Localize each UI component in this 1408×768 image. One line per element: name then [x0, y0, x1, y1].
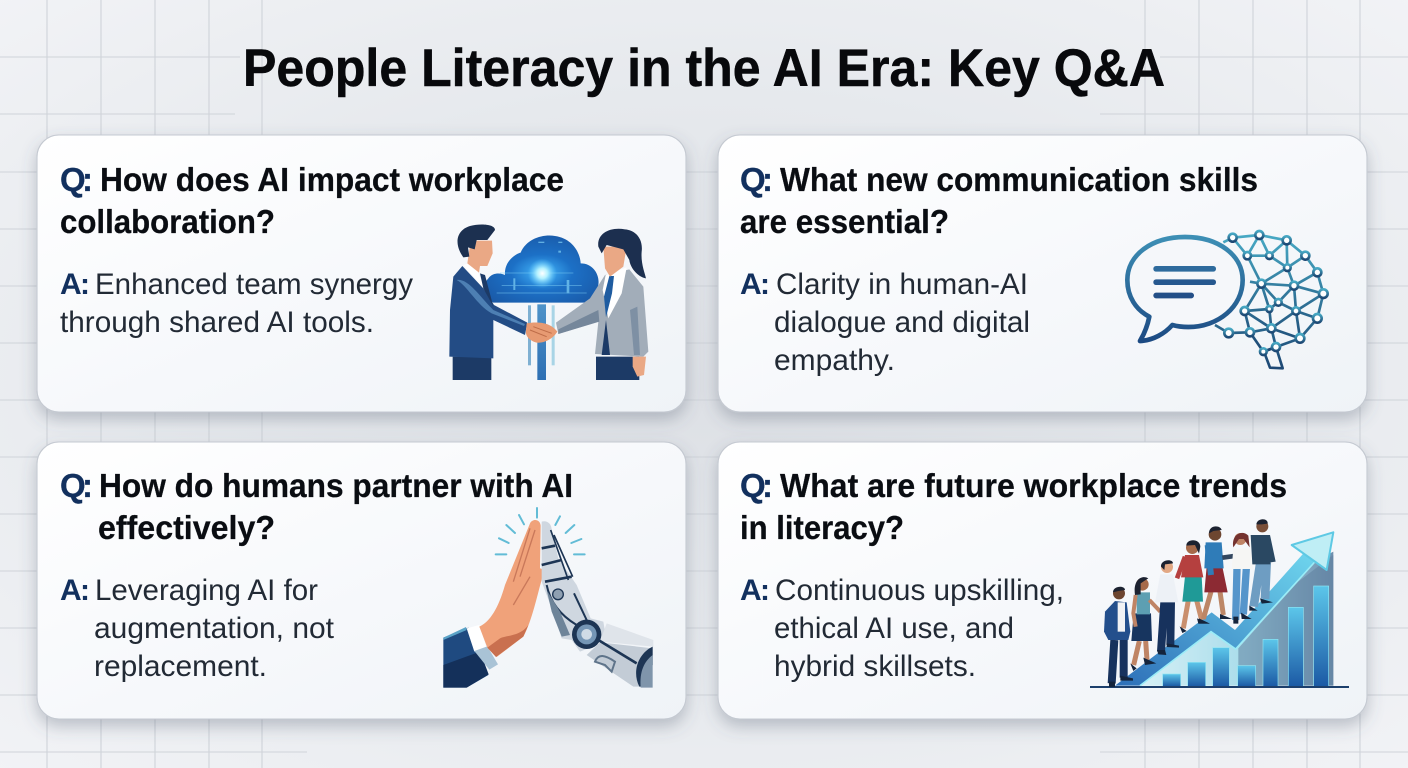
question: How does AI impact workplace [100, 161, 564, 198]
question: Q: [740, 161, 773, 198]
answer: empathy. [774, 344, 895, 377]
answer: A: [60, 268, 90, 301]
answer: A: [740, 268, 770, 301]
panel: future trends [718, 442, 1367, 719]
question: in literacy? [740, 509, 904, 546]
person 5 [1198, 526, 1247, 624]
question: Q: [60, 161, 93, 198]
answer: augmentation, not [94, 612, 335, 645]
person 4 [1177, 540, 1209, 633]
panel: human-AI partnership [37, 442, 686, 719]
person 6 [1232, 533, 1253, 624]
question: collaboration? [60, 203, 275, 240]
answer: replacement. [94, 650, 267, 683]
answer: ethical AI use, and [774, 612, 1014, 645]
answer: Leveraging AI for [95, 574, 318, 607]
icon: handshake under AI cloud [449, 225, 648, 380]
icon: human and robot high five [443, 508, 653, 688]
question: are essential? [740, 203, 949, 240]
answer: Clarity in human-AI [776, 268, 1028, 301]
icon: speech bubble and neural brain [1127, 231, 1328, 368]
person 2 [1130, 577, 1160, 671]
answer: A: [60, 574, 90, 607]
person 3 [1155, 560, 1179, 655]
icon: team climbing growth chart [1090, 519, 1349, 688]
panel: communication skills [718, 135, 1367, 412]
person 7 [1249, 519, 1276, 611]
question: Q: [740, 467, 773, 504]
answer: A: [740, 574, 770, 607]
question: effectively? [98, 509, 275, 546]
answer: hybrid skillsets. [774, 650, 976, 683]
panel: workplace collaboration [37, 135, 686, 412]
answer: through shared AI tools. [60, 306, 374, 339]
card background [718, 442, 1367, 719]
card background [718, 135, 1367, 412]
answer: Enhanced team synergy [95, 268, 413, 301]
card background [37, 442, 686, 719]
question: How do humans partner with AI [99, 467, 573, 504]
question: What are future workplace trends [780, 467, 1287, 504]
question: Q: [60, 467, 93, 504]
answer: Continuous upskilling, [775, 574, 1064, 607]
person 1 [1104, 587, 1133, 687]
answer: dialogue and digital [774, 306, 1030, 339]
title: People Literacy in the AI Era: Key Q&A [243, 39, 1165, 98]
card background [37, 135, 686, 412]
question: What new communication skills [780, 161, 1258, 198]
